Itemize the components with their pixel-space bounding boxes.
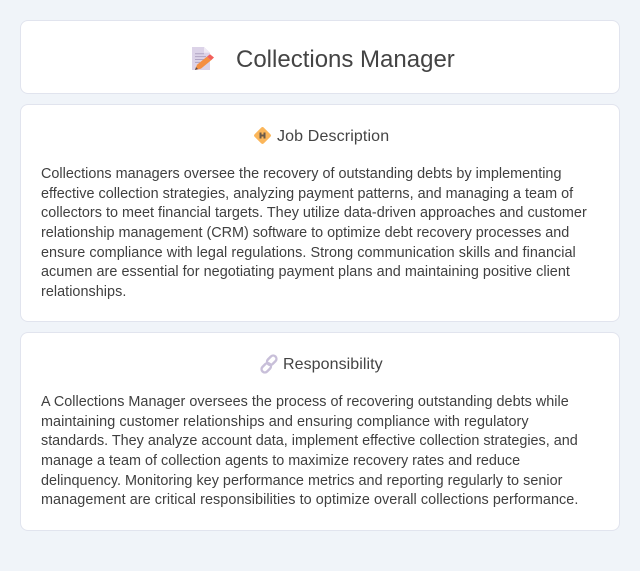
panel: responsibility [20,332,620,531]
text block: job description: Collections managers oversee the recovery of outstanding debts by implementing [41,166,561,182]
text block: responsibility: standards. They analyze account data, implement effective collection strategies, and [41,433,578,449]
icon: chain link [260,354,278,374]
text block: responsibility: maintaining customer relationships and ensuring compliance with regulatory [41,414,529,430]
icon: document with pencil [192,47,214,70]
text block: job description: effective collection strategies, analyzing payment patterns, and managing a team of [41,186,573,202]
text block: responsibility: delinquency. Monitoring key performance metrics and reporting regularly to senior [41,473,562,489]
text block: job description: collectors to meet financial targets. They utilize data-driven approaches and customer [41,205,587,221]
heading: responsibility: Responsibility [283,356,383,373]
text block: job description: acumen are essential for negotiating payment plans and maintaining positive client [41,264,570,280]
panel: job description [20,104,620,322]
text block: job description: relationship management (CRM) software to optimize debt recovery processes and [41,225,569,241]
title: Collections Manager [236,46,455,73]
panel: title card [20,20,620,94]
text block: job description: ensure compliance with legal regulations. Strong communication skills and financial [41,245,576,261]
heading: job description: Job Description [277,128,389,145]
text block: job description: relationships. [41,284,126,300]
text block: responsibility: management are critical responsibilities to optimize overall collections performance. [41,492,578,508]
text block: responsibility [41,394,578,508]
icon: orange diamond [254,127,271,144]
text block: responsibility: manage a team of collection agents to maximize recovery rates and reduce [41,453,520,469]
text block: responsibility: A Collections Manager oversees the process of recovering outstanding debts while [41,394,569,410]
text block: job description [41,166,587,300]
